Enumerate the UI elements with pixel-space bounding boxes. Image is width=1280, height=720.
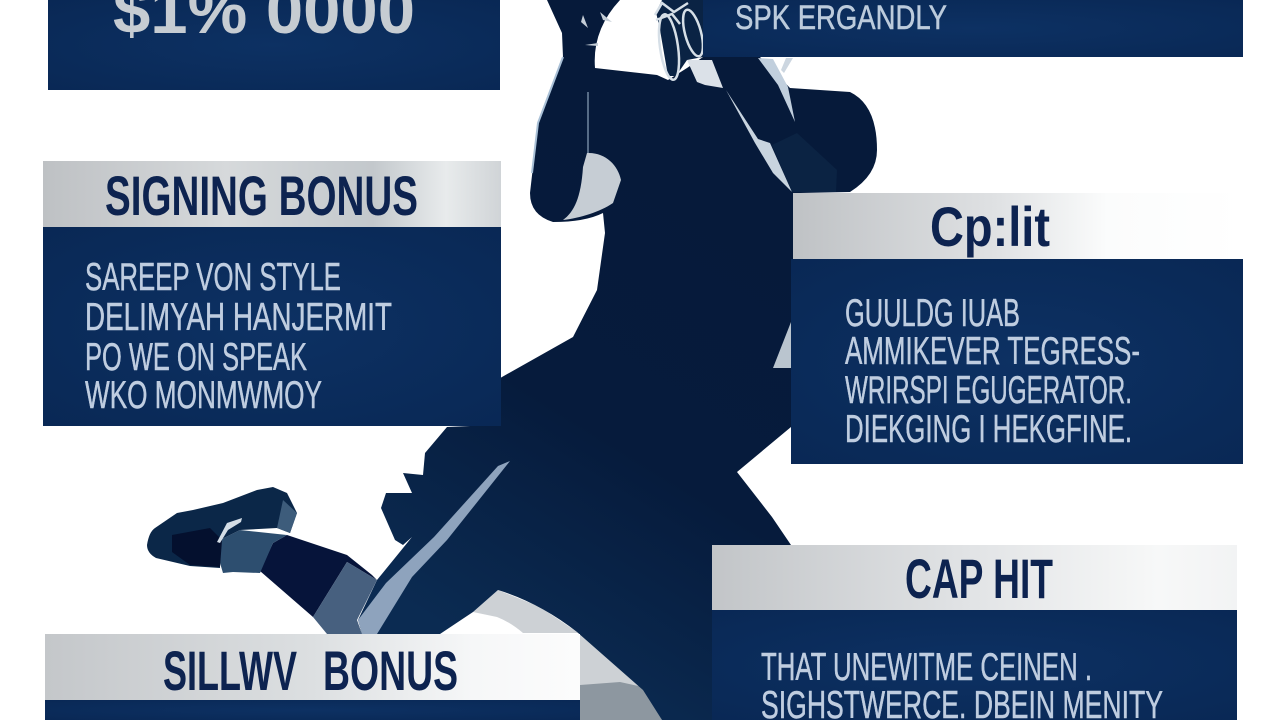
helmet facemask [655, 0, 707, 81]
calf [313, 562, 377, 634]
heading bar [793, 193, 1242, 259]
dark sock band [260, 535, 377, 617]
body text [791, 259, 1243, 464]
body text: WKO MONMWMOY [85, 374, 322, 417]
illustration: football player silhouette [147, 0, 877, 720]
body text: DELIMYAH HANJERMIT [85, 296, 392, 339]
panel: top left figure [48, 0, 500, 90]
silver wedge behind the hip [473, 590, 643, 690]
panel: top right [703, 0, 1243, 57]
body strip [45, 700, 580, 720]
heading bar: Cp:lit [930, 195, 1050, 258]
raised knee shadow [580, 682, 662, 720]
body text: AMMIKEVER TEGRESS- [845, 330, 1140, 373]
arm highlight lines [532, 57, 563, 173]
panel: bottom left bonus [45, 634, 580, 720]
thigh stripe [358, 461, 510, 634]
heading bar: SILLWV [163, 639, 297, 702]
heading bar: CAP HIT [905, 547, 1053, 610]
heading bar: BONUS [323, 639, 458, 702]
body text: SAREEP VON STYLE [85, 256, 341, 299]
boot [147, 487, 297, 568]
side sliver [773, 322, 791, 368]
neck collar [687, 60, 723, 88]
heading bar: SIGNING BONUS [105, 164, 418, 227]
body text: PO WE ON SPEAK [85, 336, 307, 379]
torso and legs [358, 0, 877, 720]
body text: DIEKGING I HEKGFINE. [845, 408, 1132, 451]
panel: cap split [791, 193, 1243, 464]
hand highlights [581, 15, 588, 28]
panel: signing bonus [43, 161, 501, 426]
shoulder shade [772, 133, 837, 192]
ankle sock [220, 530, 287, 573]
panel text: SPK ERGANDLY [735, 0, 947, 37]
panel: cap hit [712, 545, 1237, 720]
sleeve highlight [563, 153, 621, 220]
body text: THAT UNEWITME CEINEN . [761, 646, 1092, 689]
body text: GUULDG IUAB [845, 292, 1020, 335]
shoulder stripes [758, 58, 795, 122]
heading bar [45, 634, 580, 702]
body text [712, 610, 1237, 720]
body text [43, 227, 501, 426]
heading bar [712, 545, 1237, 610]
